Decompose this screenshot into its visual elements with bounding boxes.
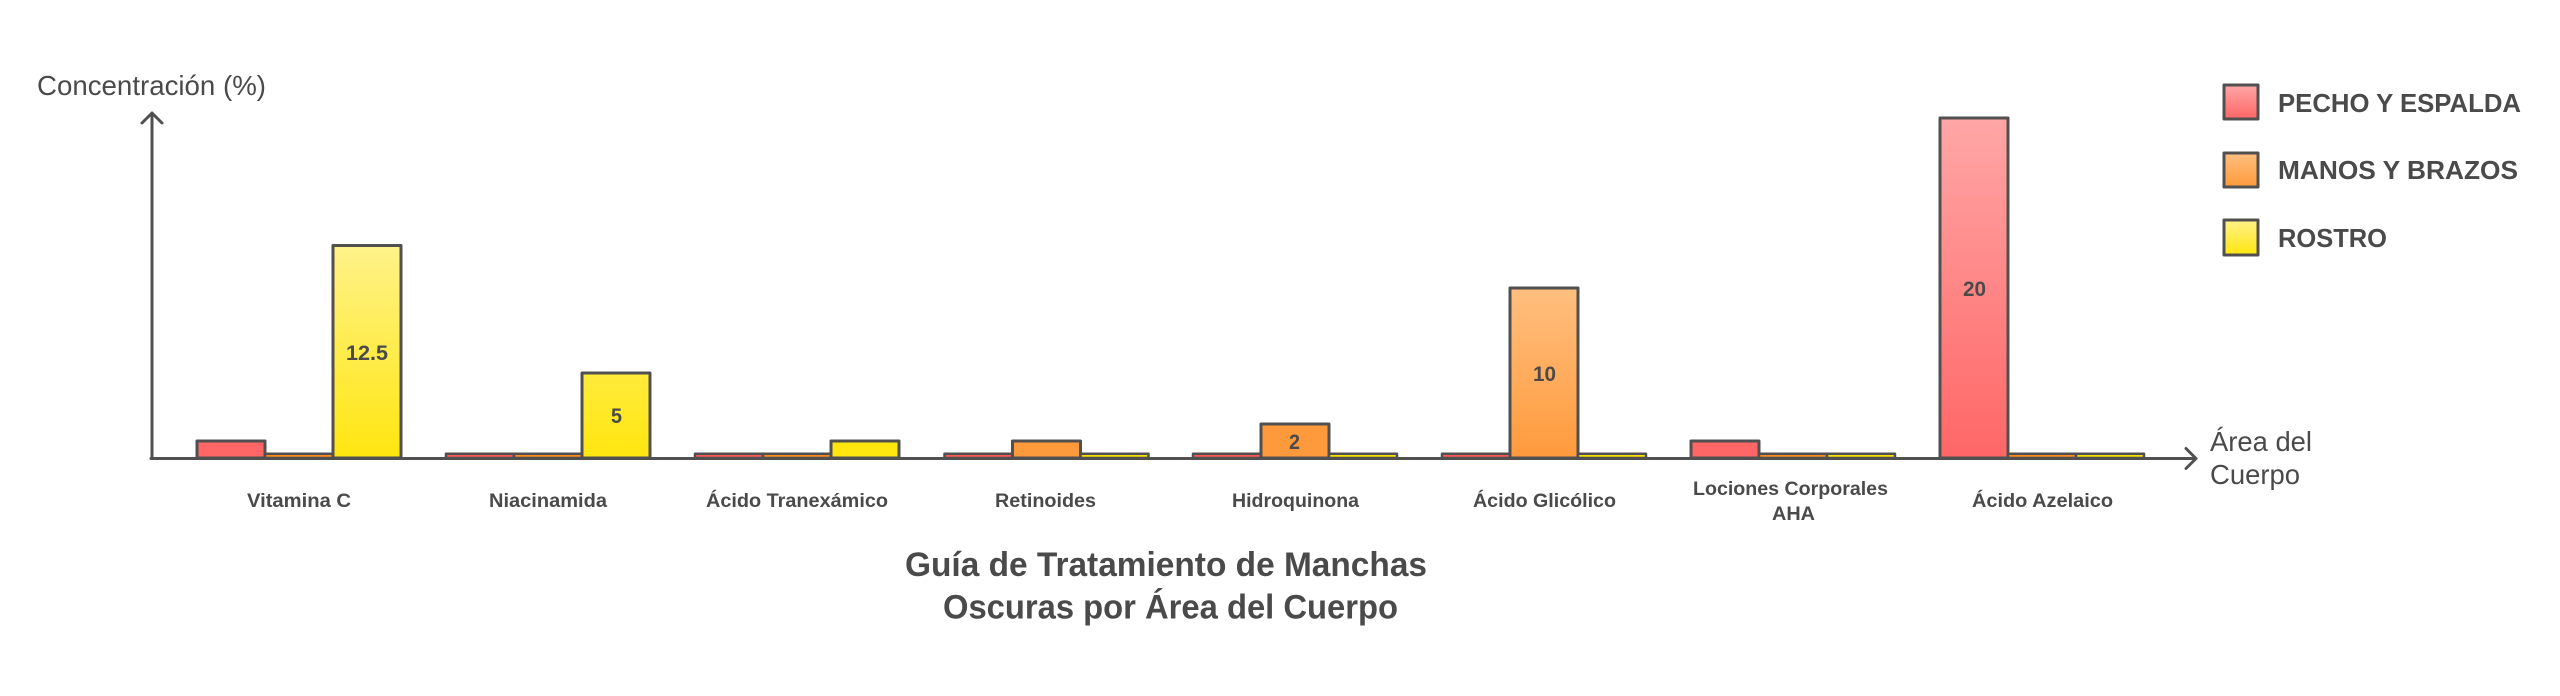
category labels: Niacinamida — [489, 491, 607, 512]
group: Niacinamida bars: 5 — [611, 405, 622, 428]
x axis arrow — [151, 448, 2196, 468]
category labels: AHA — [1772, 504, 1815, 525]
group: Ácido Azelaico bars: 20 — [1963, 278, 1986, 301]
title — [905, 546, 1427, 626]
category labels: Vitamina C — [247, 491, 351, 512]
category labels: Ácido Glicólico — [1473, 490, 1616, 512]
legend item: Rostro: ROSTRO — [2278, 223, 2387, 253]
category labels: Lociones Corporales — [1693, 479, 1888, 500]
group: Vitamina C bars — [197, 246, 401, 458]
group: Hidroquinona bars: 2 — [1289, 431, 1300, 454]
group: Hidroquinona bars — [1193, 424, 1397, 458]
group: Lociones Corporales AHA bars — [1691, 441, 1895, 458]
group: Ácido Tranexámico bars — [695, 441, 899, 458]
y axis arrow — [142, 113, 162, 458]
category labels: Hidroquinona — [1232, 491, 1359, 512]
legend item: Manos y Brazos: MANOS Y BRAZOS — [2278, 155, 2518, 185]
category labels — [247, 479, 2113, 525]
group: Vitamina C bars: 12.5 — [346, 342, 388, 365]
group: Retinoides bars — [944, 441, 1148, 458]
legend — [2224, 85, 2521, 255]
category labels: Ácido Tranexámico — [706, 490, 888, 512]
x axis label: Área del — [2210, 426, 2312, 457]
category labels: Retinoides — [995, 491, 1096, 512]
group: Ácido Glicólico bars — [1442, 288, 1646, 458]
x axis label — [2210, 426, 2312, 490]
category labels: Ácido Azelaico — [1972, 490, 2113, 512]
group: Ácido Azelaico bars — [1940, 118, 2144, 458]
group: Niacinamida bars — [446, 373, 650, 458]
legend item: Rostro — [2224, 220, 2387, 255]
group: Ácido Glicólico bars: 10 — [1533, 363, 1556, 386]
y axis label: Concentración (%) — [37, 70, 266, 101]
legend item: Pecho y Espalda: PECHO Y ESPALDA — [2278, 88, 2521, 118]
title: Oscuras por Área del Cuerpo — [943, 588, 1398, 626]
x axis label: Cuerpo — [2210, 459, 2300, 490]
title: Guía de Tratamiento de Manchas — [905, 546, 1427, 584]
